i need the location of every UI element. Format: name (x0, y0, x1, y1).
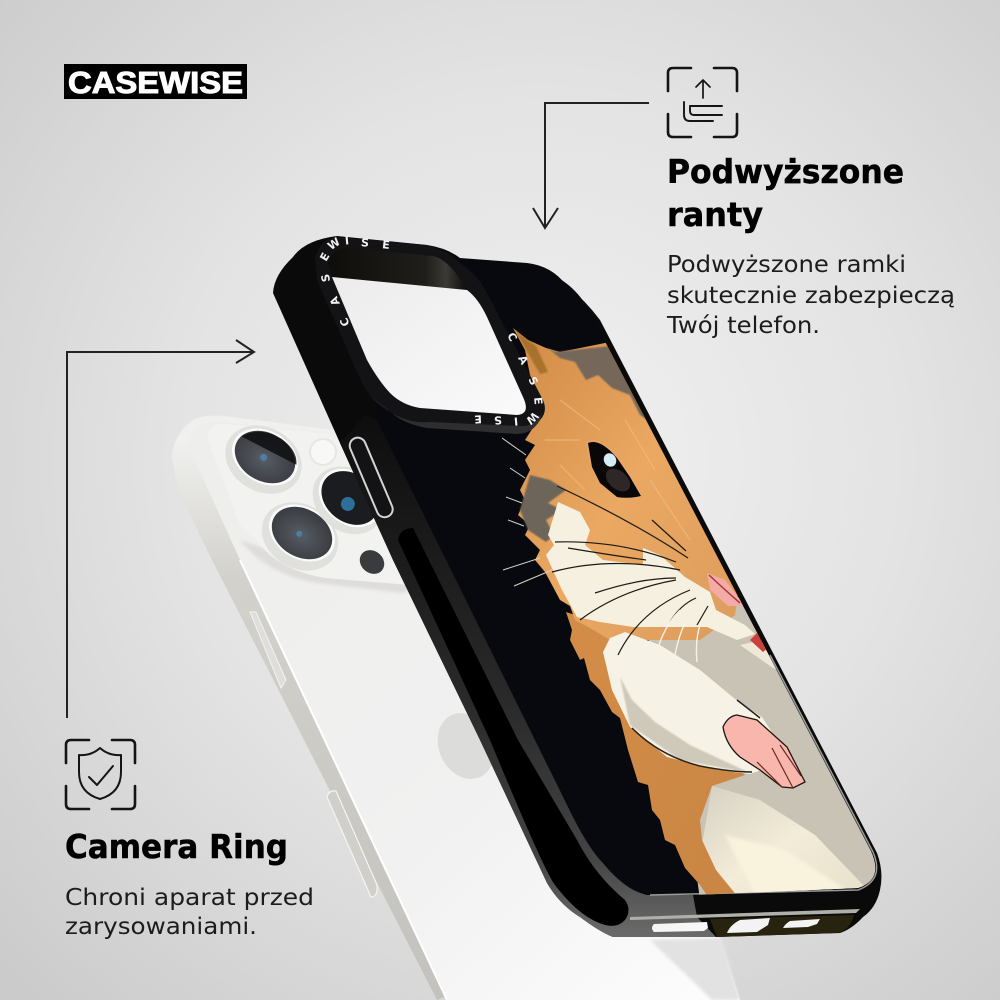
text: camera ring description: Chroni aparat przed (65, 885, 314, 911)
speaker cut-out centre (727, 918, 770, 933)
case outer shell (273, 236, 881, 937)
ring text: W (325, 235, 343, 253)
side button lower (327, 791, 377, 897)
camera ring (315, 234, 545, 434)
icon: raised edges (668, 68, 737, 137)
nose (707, 573, 745, 606)
head fur strokes (545, 400, 690, 540)
bottom shade (650, 938, 740, 1000)
text: camera ring description (65, 885, 314, 940)
ring text: I (513, 414, 519, 428)
hamster print (502, 328, 900, 900)
lens 1 (213, 412, 314, 507)
ring text: S (360, 236, 370, 250)
ring text: W (523, 409, 541, 427)
apple logo (427, 704, 505, 788)
camera plateau shadow (240, 540, 420, 593)
heading: Podwyższone ranty: ranty (667, 195, 763, 234)
text: raised edges description (666, 252, 955, 339)
ring text: E (531, 397, 545, 405)
ring text: E (317, 250, 333, 264)
whiskers on black (502, 438, 552, 586)
camera opening wall (328, 248, 467, 290)
ring text: C (337, 316, 353, 328)
text: raised edges description: skutecznie zabezpieczą (667, 283, 955, 309)
ring text (317, 234, 545, 428)
lower cream belly (702, 786, 870, 898)
arm outline (632, 728, 752, 772)
arrow: camera ring feature to lens (67, 340, 254, 718)
lens 2 (249, 489, 351, 584)
arm shading (620, 677, 750, 773)
eye (586, 440, 645, 500)
bottom lip olive (710, 915, 854, 937)
ring text: A (327, 294, 343, 307)
inner rim highlight (650, 655, 877, 895)
ear shade (516, 332, 548, 374)
ring lower lip (373, 398, 542, 434)
speaker cut-out right (783, 919, 820, 928)
text: raised edges description: Podwyższone ramki (667, 252, 906, 278)
lens 3 (299, 453, 397, 548)
black case (273, 236, 881, 937)
phone side band (172, 416, 610, 1000)
bottom silver strip (630, 909, 860, 920)
side slot (398, 528, 628, 926)
sensor (355, 545, 389, 579)
arrow: top feature to case (533, 103, 649, 228)
text: camera ring description: zarysowaniami. (65, 914, 257, 940)
logo: CASEWISE (68, 65, 243, 100)
ring text: C (504, 330, 520, 344)
heading: Podwyższone ranty: Podwyższone (667, 152, 904, 191)
face edge highlight (240, 560, 447, 1000)
paw (723, 715, 805, 788)
ring text: I (344, 234, 350, 248)
speaker pill (347, 435, 395, 520)
heading: Podwyższone ranty (667, 152, 904, 234)
side button upper (250, 612, 286, 688)
printed back (360, 259, 875, 895)
ring text: E (474, 412, 482, 426)
heading: Camera Ring: Camera Ring (65, 827, 288, 866)
arm (603, 632, 790, 774)
white whiskers on chest (658, 610, 700, 662)
camera plateau (208, 424, 410, 585)
mouth (750, 633, 766, 652)
ring text: S (319, 273, 333, 283)
icon: shield (66, 740, 135, 809)
cheek gray patch (520, 475, 566, 542)
ring text: S (525, 375, 541, 387)
text: raised edges description: Twój telefon. (666, 313, 820, 339)
belly highlight (726, 836, 845, 892)
flash (310, 439, 336, 465)
nose line (709, 575, 740, 603)
ring body (315, 237, 545, 433)
ring text: S (494, 413, 502, 427)
whiskers on fur (552, 486, 708, 655)
phone back face (188, 421, 740, 1000)
white cheek (546, 502, 755, 640)
translucent bumper (340, 415, 716, 937)
mouth patch (740, 640, 776, 670)
beige fur panel (648, 598, 876, 895)
ring text: A (515, 353, 531, 367)
white phone (172, 412, 740, 1000)
ring text: E (382, 238, 390, 252)
charging port (652, 922, 708, 932)
orange body (566, 612, 745, 897)
head gray patch (548, 346, 646, 420)
head fur (513, 328, 740, 650)
paw toes (757, 745, 801, 788)
camera opening (332, 277, 526, 415)
